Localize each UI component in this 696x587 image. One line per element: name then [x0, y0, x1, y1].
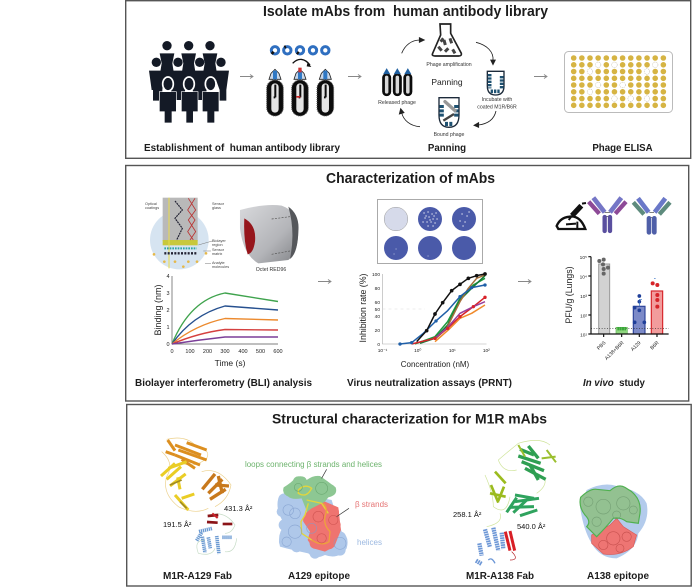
- labels: BLI biosensor annotations: coatings: [145, 206, 159, 210]
- heading: characterization of mAbs: Characterization of mAbs: [326, 171, 495, 187]
- tick labels: treatment groups: A138+B6R: [604, 340, 626, 362]
- labels: BLI biosensor annotations: Analyte: [212, 261, 225, 265]
- image: PRNT plate: [378, 200, 482, 264]
- chart: BLI binding curves: 0: [170, 349, 174, 355]
- label: bound phage: Bound phage: [434, 132, 465, 138]
- axis label: inhibition rate: Inhibition rate (%): [358, 273, 368, 342]
- labels: BLI biosensor annotations: matrix: [212, 252, 222, 256]
- chart: lung viral titers: 10³: [580, 294, 587, 300]
- icon: phage particles: [267, 59, 334, 116]
- chart: neutralization curves: 80: [375, 286, 380, 292]
- labels: BLI biosensor annotations: Optical: [145, 202, 157, 206]
- labels: BLI biosensor annotations: molecules: [212, 265, 229, 269]
- ribbon: M1R-A138 Fab complex: [476, 440, 556, 564]
- labels: BLI biosensor annotations: Sensor: [212, 248, 225, 252]
- caption: A138 epitope: A138 epitope: [587, 571, 650, 582]
- axis label: PFU per gram: PFU/g (Lungs): [564, 266, 574, 324]
- icon: antibody one: [589, 198, 626, 231]
- surface: A138 epitope: [580, 485, 647, 558]
- chart: BLI binding curves: 500: [256, 349, 265, 355]
- icon: mouse with syringe: [557, 203, 586, 229]
- labels: BLI biosensor annotations: [145, 202, 229, 269]
- caption: PRNT: Virus neutralization assays (PRNT): [347, 378, 512, 389]
- icon: bound phage well: [439, 98, 459, 127]
- arrow: BLI to PRNT: [318, 280, 331, 284]
- chart: lung viral titers: [564, 255, 669, 362]
- labels: BLI biosensor annotations: Sensor: [212, 202, 225, 206]
- label: 431.3: 431.3 Å²: [224, 504, 253, 513]
- icon: Octet RED96 instrument: [240, 205, 299, 263]
- caption: BLI analysis: Biolayer interferometry (BLI) analysis: [135, 378, 312, 389]
- axis label: time: Time (s): [215, 358, 246, 368]
- label: helices: helices: [357, 538, 382, 547]
- caption: in vivo study: In vivo study: [583, 378, 646, 389]
- labels: BLI biosensor annotations: Biolayer: [212, 239, 226, 243]
- chart: BLI binding curves: 0: [166, 342, 170, 348]
- chart: neutralization curves: 20: [375, 328, 380, 334]
- surface: A129 epitope: [277, 469, 349, 559]
- icon: released phages: [382, 68, 412, 96]
- axis label: binding: Binding (nm): [153, 284, 163, 336]
- label: 191.5: 191.5 Å²: [163, 520, 192, 529]
- tick labels: treatment groups: [596, 340, 661, 362]
- caption: M1R-A129 Fab: M1R-A129 Fab: [163, 571, 232, 582]
- arrow: phage to panning: [348, 74, 361, 78]
- chart: lung viral titers: 10⁴: [580, 274, 587, 280]
- diagram: panning cycle: [378, 24, 517, 138]
- caption: phage ELISA: Phage ELISA: [592, 143, 653, 154]
- panel: characterization of mAbs: [126, 166, 689, 401]
- chart: BLI binding curves: 3: [166, 291, 170, 297]
- chart: BLI binding curves: 4: [166, 274, 170, 280]
- labels: BLI biosensor annotations: region: [212, 243, 223, 247]
- label: coated M1R/B6R: coated M1R/B6R: [477, 104, 517, 110]
- chart: BLI binding curves: 600: [273, 349, 283, 355]
- chart: neutralization curves: 10⁻¹: [378, 348, 388, 354]
- chart: BLI binding curves: 200: [203, 349, 212, 355]
- arrows: panning cycle: [399, 38, 496, 127]
- label: incubate with coated M1R/B6R: Incubate with: [482, 97, 512, 103]
- caption: A129 epitope: A129 epitope: [288, 571, 351, 582]
- diagram: BLI biosensor: [150, 198, 212, 269]
- axis label: concentration: Concentration (nM): [401, 360, 470, 369]
- chart: neutralization curves: 10²: [483, 348, 490, 354]
- chart: neutralization curves: 0: [377, 342, 380, 348]
- icon: plasmid rings: [271, 47, 329, 54]
- heading: isolate mAbs: Isolate mAbs from human antibody library: [263, 4, 548, 20]
- chart: neutralization curves: 60: [375, 300, 380, 306]
- icon: group of people: [149, 41, 229, 123]
- label: 258.1: 258.1 Å²: [453, 510, 482, 519]
- caption: M1R-A138 Fab: M1R-A138 Fab: [466, 571, 534, 582]
- ribbon: M1R-A129 Fab complex: [161, 438, 237, 554]
- label: released phage: Released phage: [378, 100, 416, 106]
- chart: BLI binding curves: 300: [220, 349, 230, 355]
- chart: BLI binding curves: [153, 274, 283, 368]
- panel: structural characterization: [127, 404, 691, 586]
- chart: neutralization curves: [358, 272, 490, 369]
- icon: ELISA plate: [564, 52, 672, 112]
- chart: BLI binding curves: 100: [185, 349, 195, 355]
- arrow: panning to ELISA: [534, 74, 547, 78]
- chart: neutralization curves: 50: [375, 307, 380, 313]
- label: beta strands: β strands: [355, 500, 388, 509]
- chart: lung viral titers: 10¹: [580, 332, 587, 338]
- labels: BLI biosensor annotations: glass: [212, 206, 221, 210]
- chart: neutralization curves: 40: [375, 314, 380, 320]
- label: Octet RED96: Octet RED96: [256, 267, 286, 273]
- chart: lung viral titers: 10⁵: [580, 255, 587, 261]
- label: 540.0: 540.0 Å²: [517, 522, 546, 531]
- caption: establishment of library: Establishment of human antibody library: [144, 143, 341, 154]
- arrow: library to phage: [240, 74, 253, 78]
- icon: flask for phage amplification: [432, 24, 461, 56]
- chart: BLI binding curves: 400: [238, 349, 248, 355]
- arrow: PRNT to in vivo: [518, 280, 531, 284]
- chart: neutralization curves: 100: [372, 272, 380, 278]
- panel: isolate mAbs from human antibody library: [126, 1, 691, 158]
- label: phage amplification: Phage amplification: [426, 62, 472, 68]
- label: panning center: Panning: [431, 77, 463, 87]
- heading: structural characterization: Structural characterization for M1R mAbs: [272, 410, 547, 426]
- chart: lung viral titers: 10²: [580, 314, 587, 320]
- icon: coated well: [487, 71, 504, 95]
- chart: neutralization curves: 10¹: [449, 348, 456, 354]
- chart: neutralization curves: 10⁰: [414, 348, 421, 354]
- tick labels: treatment groups: A129: [630, 340, 643, 353]
- caption: panning: Panning: [428, 143, 466, 154]
- label: loops: loops connecting β strands and helices: [245, 460, 382, 469]
- chart: BLI binding curves: 2: [166, 308, 170, 314]
- tick labels: treatment groups: B6R: [649, 340, 661, 351]
- icon: antibody two: [633, 198, 670, 232]
- tick labels: treatment groups: PBS: [596, 340, 608, 351]
- chart: BLI binding curves: 1: [166, 325, 170, 331]
